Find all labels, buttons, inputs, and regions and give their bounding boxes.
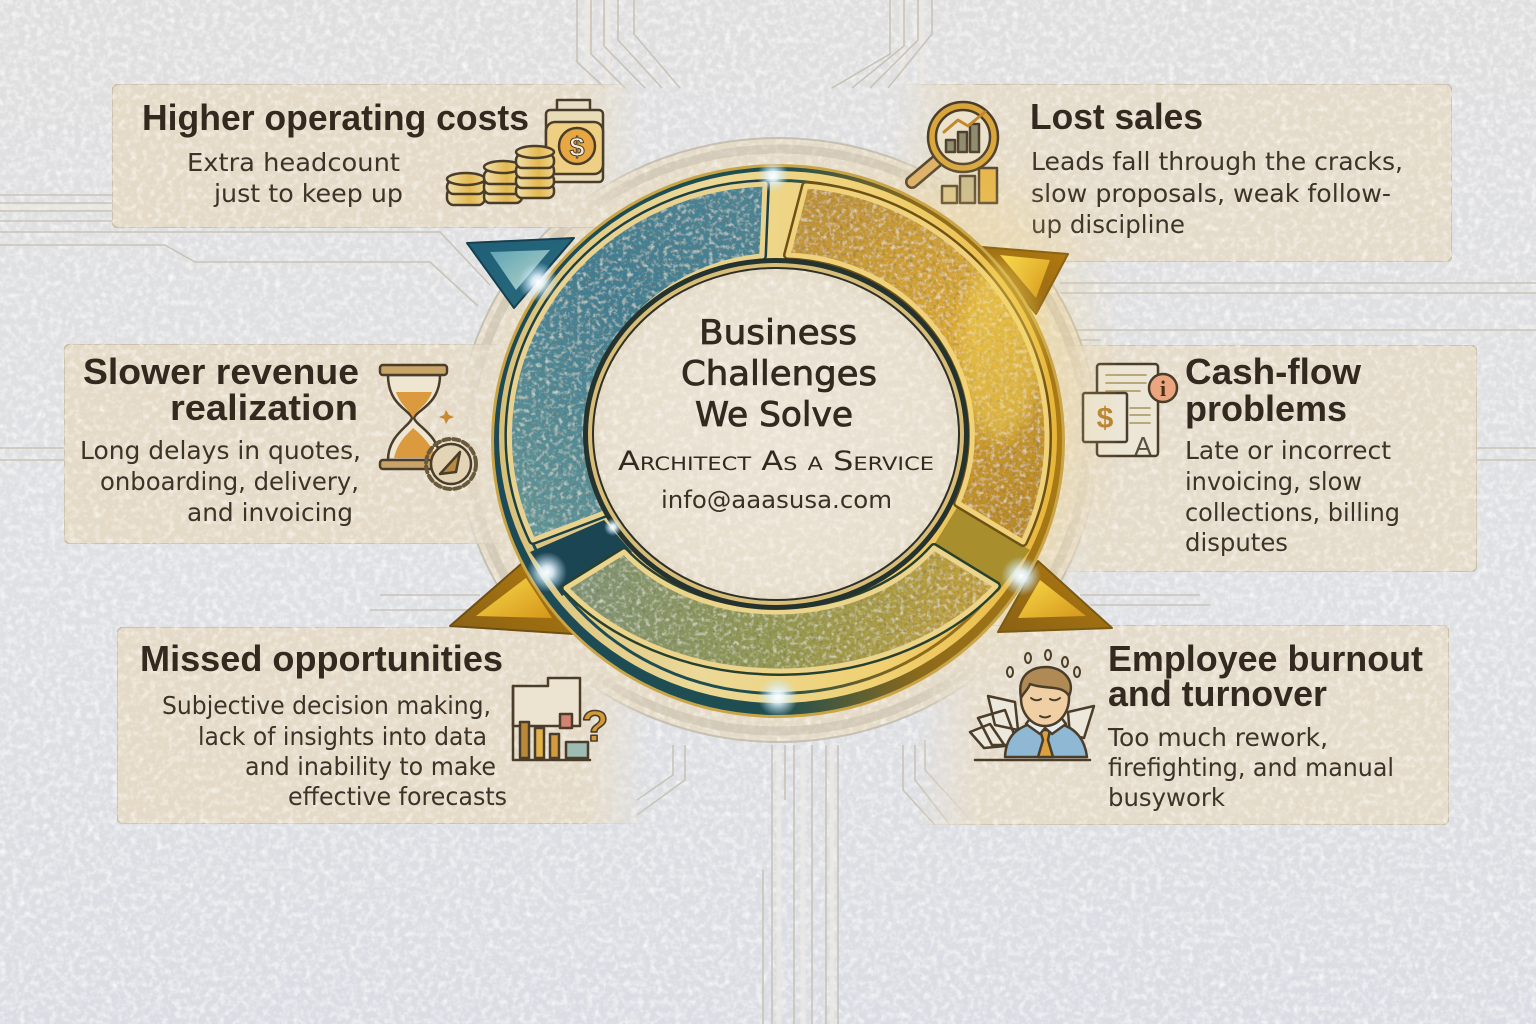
heading: Slower revenue (83, 351, 359, 392)
description: Subjective decision making, (162, 691, 491, 720)
segment: gold (788, 186, 1047, 542)
card (112, 84, 642, 228)
icon: invoice documents: A (1134, 431, 1152, 461)
ring frame (491, 164, 1065, 718)
panel: missed opportunities (117, 627, 647, 824)
icon: magnifier with chart (912, 102, 998, 203)
centre title: We Solve (695, 395, 853, 435)
description: Leads fall through the cracks, (1031, 147, 1403, 176)
dark wedge: lower left (530, 520, 632, 596)
heading: problems (1185, 388, 1347, 429)
arrowhead: bottom-right gold (998, 561, 1112, 632)
glow on gold segment (960, 260, 1040, 440)
heading: Cash-flow (1185, 351, 1362, 392)
icon: invoice documents: $ (1097, 402, 1114, 435)
warm glow from gold side (830, 170, 1090, 630)
description: disputes (1185, 528, 1288, 557)
description: lack of insights into data (198, 722, 487, 751)
description: Late or incorrect (1185, 436, 1391, 465)
gold wedge: lower right (932, 506, 1030, 592)
card (915, 625, 1449, 825)
heading (83, 351, 359, 428)
description (1031, 147, 1403, 239)
description: just to keep up (213, 179, 403, 208)
centre title: Challenges (681, 354, 877, 394)
panel: cash-flow problems (1050, 345, 1477, 572)
heading: realization (170, 387, 358, 428)
description (162, 691, 507, 811)
arrowhead: top-right gold (982, 247, 1068, 314)
description: slow proposals, weak follow- (1031, 179, 1391, 208)
arrowhead: top-left blue (467, 238, 574, 308)
panel: higher operating costs (112, 84, 642, 228)
segment: blue (509, 184, 765, 540)
panel: employee burnout and turnover (915, 625, 1449, 825)
icon: coins and money bag: $ (569, 132, 585, 162)
icon: bar chart with question mark: ? (582, 702, 608, 751)
icon: invoice documents: i (1160, 376, 1166, 401)
centre title: Business (699, 313, 857, 353)
inner disc (583, 258, 969, 610)
description: collections, billing (1185, 498, 1400, 527)
description: Extra headcount (187, 148, 400, 177)
description: effective forecasts (288, 782, 507, 811)
description: and invoicing (187, 498, 353, 527)
arrowhead: bottom-left gold (450, 558, 574, 634)
centre title (681, 313, 877, 435)
heading: Lost sales (1030, 96, 1203, 137)
heading: Missed opportunities (140, 638, 503, 679)
description (1107, 723, 1394, 812)
heading (1185, 351, 1362, 429)
description: up discipline (1031, 210, 1185, 239)
card (1050, 345, 1477, 572)
centre subtitle: Architect As a Service (618, 446, 934, 477)
card (890, 84, 1452, 262)
description (187, 148, 403, 208)
description: firefighting, and manual (1108, 753, 1394, 782)
description: Too much rework, (1107, 723, 1328, 752)
description: and inability to make (245, 752, 496, 781)
icon: coins and money bag (447, 100, 603, 205)
panel: slower revenue realization (64, 344, 514, 544)
icon: bar chart with question mark (513, 678, 608, 760)
segment: olive gold (566, 548, 996, 671)
description (80, 436, 361, 527)
heading (1108, 638, 1423, 714)
card (64, 344, 514, 544)
description (1185, 436, 1400, 557)
description: invoicing, slow (1185, 467, 1362, 496)
icon: stressed employee (970, 650, 1094, 760)
description: Long delays in quotes, (80, 436, 361, 465)
heading: and turnover (1108, 673, 1327, 714)
sparkles (518, 160, 1041, 717)
centre email: info@aaasusa.com (661, 486, 892, 514)
description: busywork (1108, 783, 1225, 812)
central ring (450, 160, 1112, 718)
icon: invoice documents (1083, 364, 1177, 461)
card (117, 627, 647, 824)
icon: hourglass and gear (380, 365, 476, 489)
description: onboarding, delivery, (100, 467, 359, 496)
panel: lost sales (890, 84, 1452, 262)
heading: Employee burnout (1108, 638, 1423, 679)
warm halo behind ring (458, 138, 1098, 742)
heading: Higher operating costs (142, 97, 529, 138)
